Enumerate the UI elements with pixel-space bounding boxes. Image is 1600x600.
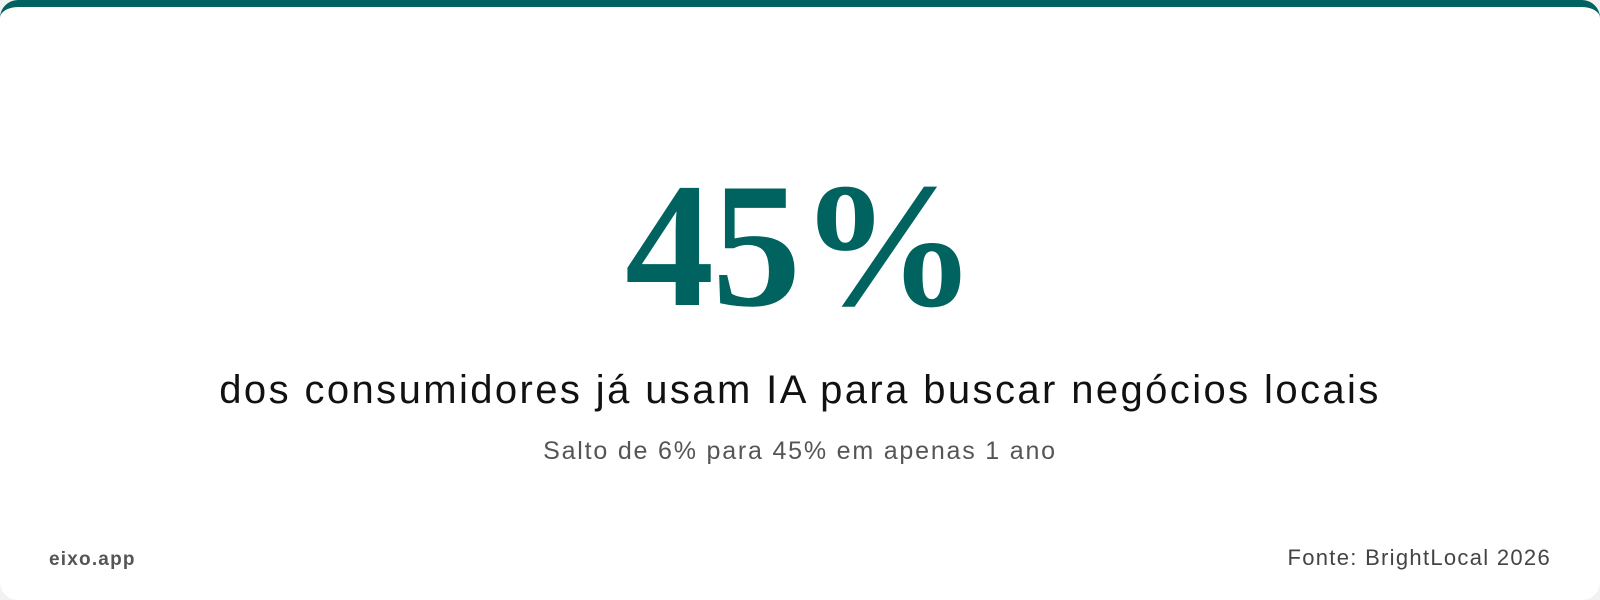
subtitle: Salto de 6% para 45% em apenas 1 ano [543,437,1057,465]
source: Fonte: BrightLocal 2026 [1288,545,1551,570]
brand: eixo.app [49,549,136,570]
headline: dos consumidores já usam IA para buscar negócios locais [219,368,1381,412]
big number: 45% [625,146,975,344]
